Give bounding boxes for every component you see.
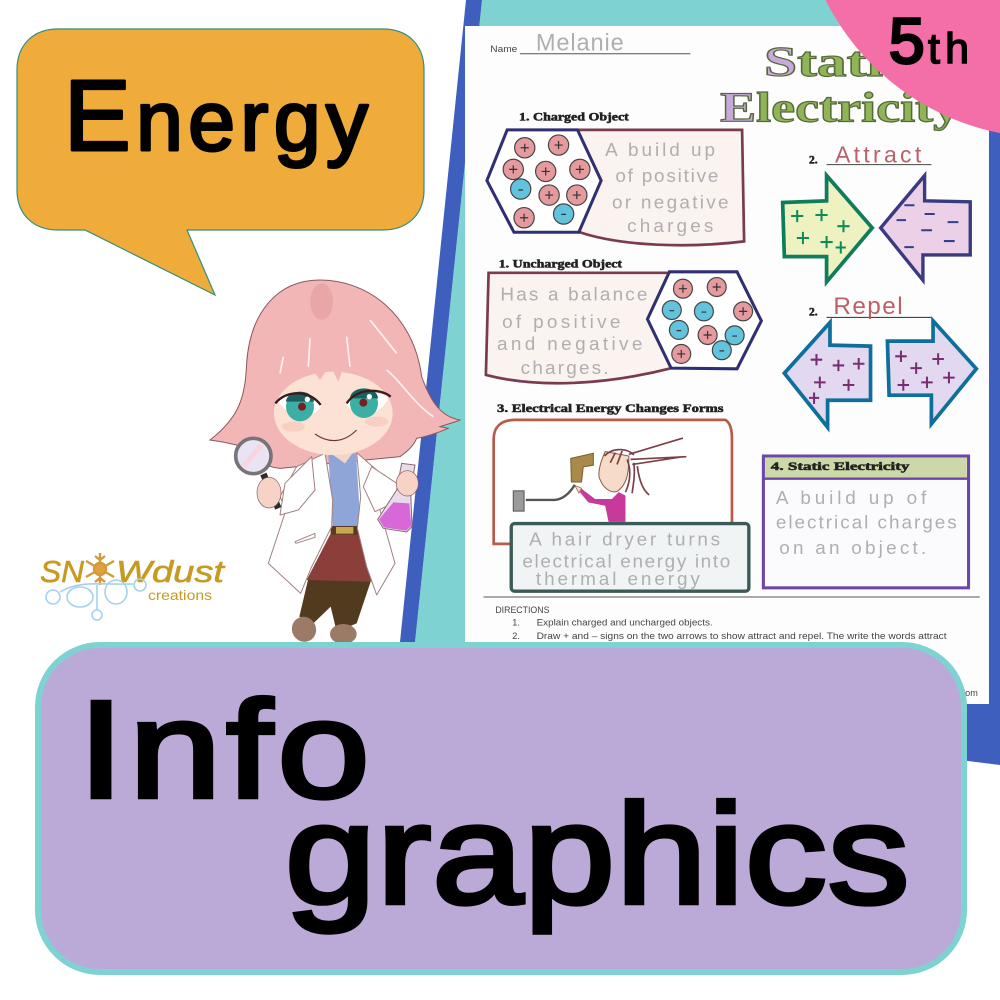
label: attract: Attract: [835, 142, 922, 168]
speech bubble text: Energy: [64, 60, 368, 172]
box: uncharged definition: [486, 273, 671, 383]
directions: om: [965, 688, 978, 698]
arrow: repel left: [784, 323, 871, 427]
magnifying glass: [236, 438, 278, 508]
directions: Draw + and – signs on the two arrows to show attract and repel. The write the words attract: [537, 631, 947, 641]
right hand: [396, 471, 418, 496]
box: hair dryer caption: thermal energy: [536, 569, 700, 590]
box: uncharged definition: and negative: [497, 334, 642, 355]
cord: [526, 485, 575, 500]
outlet: [513, 491, 524, 511]
mouth: [315, 430, 357, 441]
character: scientist girl: [210, 280, 460, 646]
shirt: [328, 453, 361, 527]
label: repel: [809, 293, 931, 320]
box: charged definition: or negative: [612, 193, 729, 214]
worksheet page: [465, 26, 989, 704]
hexagon: uncharged object: [647, 272, 761, 369]
legs: [299, 578, 371, 632]
box: uncharged definition: Has a balance: [500, 285, 647, 306]
directions: Explain charged and uncharged objects.: [537, 618, 713, 628]
box: charged definition: charges: [627, 216, 713, 237]
background: blue stripe left: [400, 0, 482, 642]
title panel: [38, 645, 964, 972]
worksheet title: [720, 39, 960, 131]
directions: 1.: [512, 618, 520, 628]
left hand: [257, 477, 281, 508]
arrow: attract right green: [783, 175, 872, 282]
heading: electrical energy: 3. Electrical Energy Changes Forms: [497, 403, 724, 415]
name line: Name: [490, 44, 517, 54]
grade badge: th: [928, 25, 969, 73]
arrow: attract left purple: [881, 175, 970, 280]
background: teal sheet: [415, 0, 1000, 704]
box: charged definition: A build up: [605, 140, 715, 161]
blush: [282, 417, 388, 432]
box: hair dryer caption: electrical energy into: [522, 552, 730, 573]
belt: [331, 526, 361, 535]
box: static electricity: electrical charges: [776, 513, 957, 534]
worksheet title: Static: [764, 39, 909, 86]
worksheet title: Electricity: [720, 84, 960, 131]
directions: [495, 605, 978, 698]
hair highlights: [280, 320, 433, 417]
logo swirls: [46, 579, 146, 620]
hexagon: charged object: [487, 130, 601, 232]
flask: [378, 463, 415, 532]
grade badge: 5: [889, 5, 925, 77]
box: static electricity: [763, 456, 969, 588]
logo: creations: [148, 587, 212, 603]
skirt: [307, 532, 372, 582]
fringe: [273, 282, 391, 393]
logo: SN: [40, 554, 85, 589]
hair dryer: [571, 453, 593, 482]
background: blue sheet right: [960, 100, 1000, 765]
directions: DIRECTIONS: [495, 605, 549, 615]
lab coat: [268, 453, 400, 595]
label: repel: 2.: [809, 307, 818, 319]
box: charged definition: of positive: [615, 166, 718, 187]
hair parting shade: [310, 283, 333, 320]
girl: [575, 438, 686, 522]
box: static electricity: A build up of: [776, 488, 927, 509]
arrow: repel right: [887, 321, 976, 424]
name line: [490, 30, 690, 56]
left eye: [275, 392, 322, 421]
name line: Melanie: [536, 30, 624, 56]
logo: Wdust: [116, 554, 226, 589]
box: hair dryer caption: [511, 524, 749, 591]
box: hair dryer caption: A hair dryer turns: [529, 530, 720, 551]
back hair: [210, 280, 460, 468]
title text: Info: Info: [78, 673, 370, 827]
face: [274, 372, 393, 455]
title text: graphics: graphics: [285, 775, 909, 934]
shoes: [288, 613, 357, 646]
logo snowflake: [86, 553, 114, 585]
speech bubble: [17, 29, 424, 295]
box: static electricity: 4. Static Electricity: [771, 461, 910, 473]
neck: [328, 450, 355, 463]
box: charged definition: [578, 130, 744, 245]
logo: [40, 553, 226, 620]
worksheet content: [484, 30, 980, 698]
label: attract: 2.: [809, 155, 818, 167]
heading: charged object: 1. Charged Object: [519, 112, 629, 124]
box: uncharged definition: of positive: [502, 312, 620, 333]
heading: uncharged object: 1. Uncharged Object: [499, 259, 622, 271]
label: repel: Repel: [833, 293, 903, 320]
box: hair dryer drawing: [494, 420, 732, 544]
box: static electricity: on an object.: [779, 538, 926, 559]
box: uncharged definition: charges.: [521, 358, 609, 379]
right eye: [347, 388, 391, 418]
grade badge: [799, 0, 1000, 138]
directions: 2.: [512, 631, 520, 641]
